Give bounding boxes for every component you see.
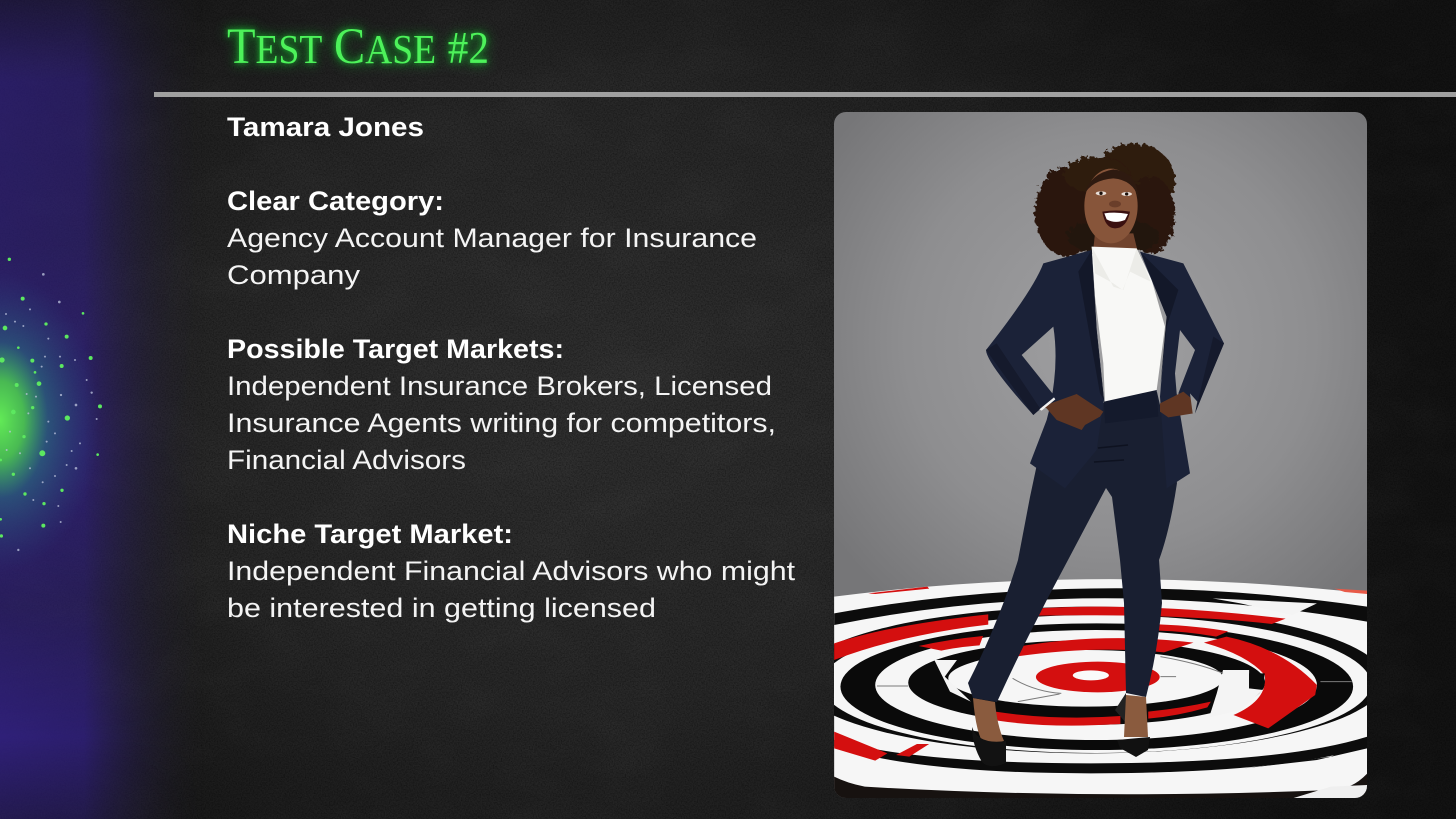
niche target market [227, 519, 796, 623]
hands [1042, 394, 1103, 430]
target on floor [797, 579, 1385, 798]
clear category [227, 186, 757, 290]
possible target markets: Possible Target Markets: [227, 334, 564, 364]
text block: name and details [227, 112, 796, 623]
possible target markets [227, 334, 776, 475]
possible target markets: Financial Advisors [227, 445, 466, 475]
stars [0, 258, 102, 551]
jacket [986, 250, 1104, 488]
cuffs [1039, 397, 1055, 411]
hairline [1086, 169, 1136, 191]
possible target markets: Insurance Agents writing for competitors, [227, 408, 776, 438]
trousers [968, 392, 1177, 702]
waistband [1104, 390, 1157, 418]
eyes [1096, 191, 1106, 195]
mouth [1102, 210, 1130, 228]
shirt [1092, 247, 1165, 402]
studio backdrop [834, 112, 1367, 798]
neck [1094, 233, 1138, 250]
niche target market: be interested in getting licensed [227, 593, 656, 623]
clear category: Clear Category: [227, 186, 444, 216]
clear category: Company [227, 260, 361, 290]
shoes and ankles [972, 693, 1150, 766]
upper body [986, 143, 1224, 488]
hair [1035, 143, 1175, 257]
woman [968, 143, 1224, 766]
title: TEST CASE #2 [227, 19, 489, 75]
photo panel: woman standing on target [797, 112, 1385, 798]
red segments [834, 587, 1367, 761]
divider rule [154, 92, 1456, 97]
niche target market: Niche Target Market: [227, 519, 513, 549]
shards [934, 598, 1317, 717]
purple and green nebula on left edge [0, 0, 175, 819]
possible target markets: Independent Insurance Brokers, Licensed [227, 371, 772, 401]
face [1084, 169, 1138, 243]
name: Tamara Jones [227, 112, 424, 142]
clear category: Agency Account Manager for Insurance [227, 223, 757, 253]
niche target market: Independent Financial Advisors who might [227, 556, 796, 586]
lapels [1078, 250, 1104, 400]
